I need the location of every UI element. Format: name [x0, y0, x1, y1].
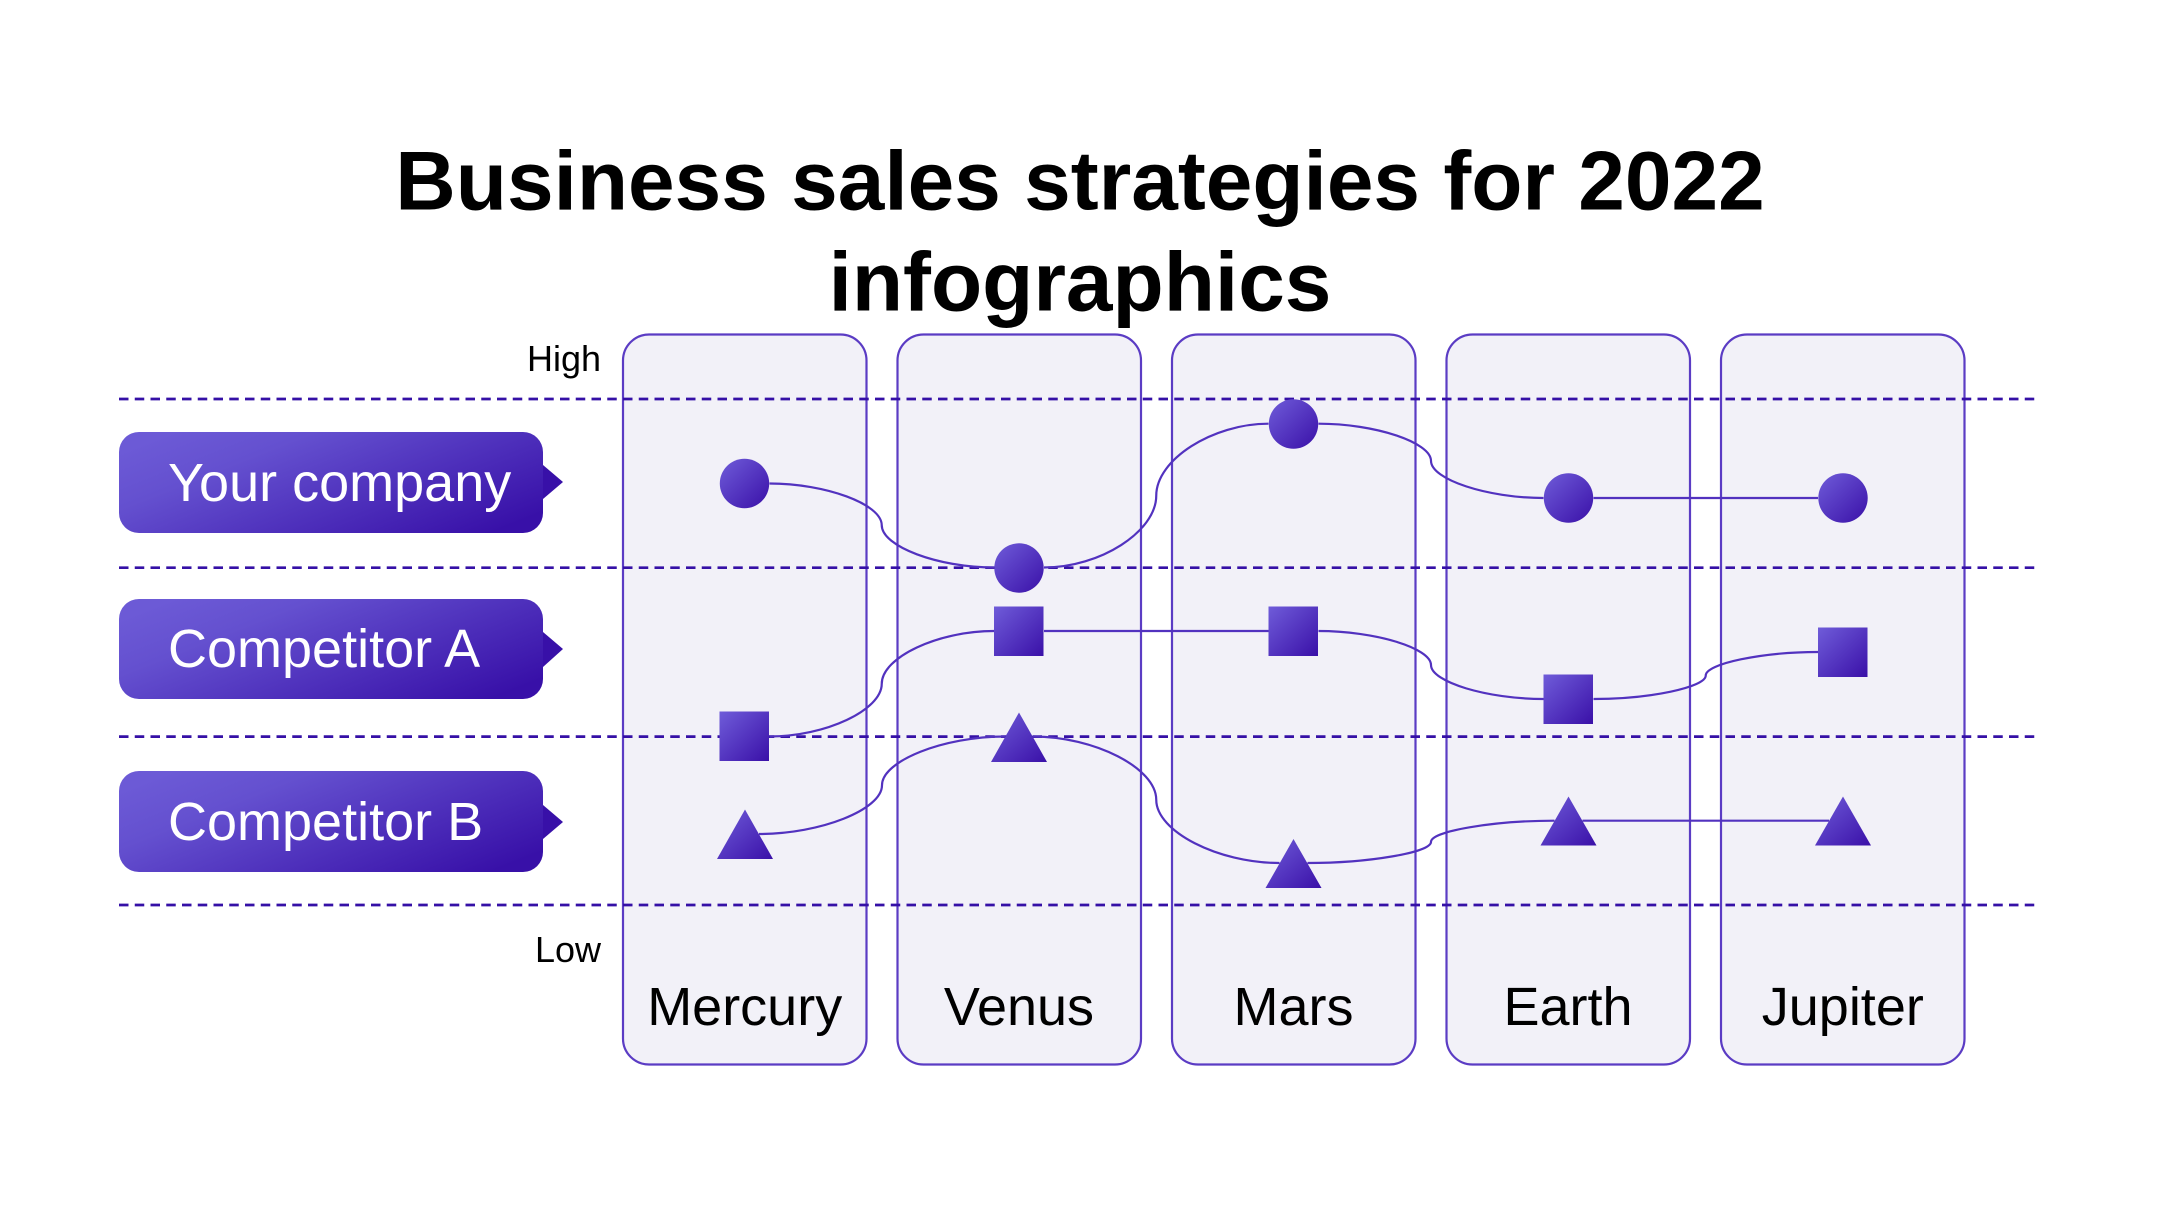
title: infographics [829, 234, 1331, 328]
title: Business sales strategies for 2022 [395, 133, 1765, 227]
label: Competitor B [119, 771, 563, 872]
label: Competitor B: Competitor B [168, 792, 483, 852]
column label: Jupiter: Jupiter [1762, 977, 1924, 1037]
line: Competitor B trend [759, 736, 1829, 863]
column label: Venus: Venus [944, 977, 1094, 1037]
axis label: Low: Low [535, 929, 602, 970]
label: Competitor A [119, 599, 563, 699]
panel: Mercury column [623, 334, 866, 1064]
label: Competitor A: Competitor A [168, 619, 480, 679]
label: Your company [119, 432, 563, 533]
column label: Earth: Earth [1503, 977, 1633, 1037]
line: Your company trend [770, 424, 1818, 568]
label: Your company: Your company [168, 453, 511, 513]
panel: Jupiter column [1721, 334, 1964, 1064]
panel: Earth column [1446, 334, 1690, 1064]
column label: Mars: Mars [1234, 977, 1354, 1037]
panel: Venus column [898, 334, 1141, 1064]
line: Competitor A trend [770, 631, 1818, 736]
panel: Mars column [1172, 334, 1416, 1064]
column label: Mercury: Mercury [647, 977, 842, 1037]
markers: Your company circles [720, 399, 1868, 593]
markers: Competitor B triangles [717, 712, 1871, 888]
markers: Competitor A squares [720, 606, 1868, 761]
title [395, 133, 1765, 328]
axis label: High: High [527, 338, 601, 379]
